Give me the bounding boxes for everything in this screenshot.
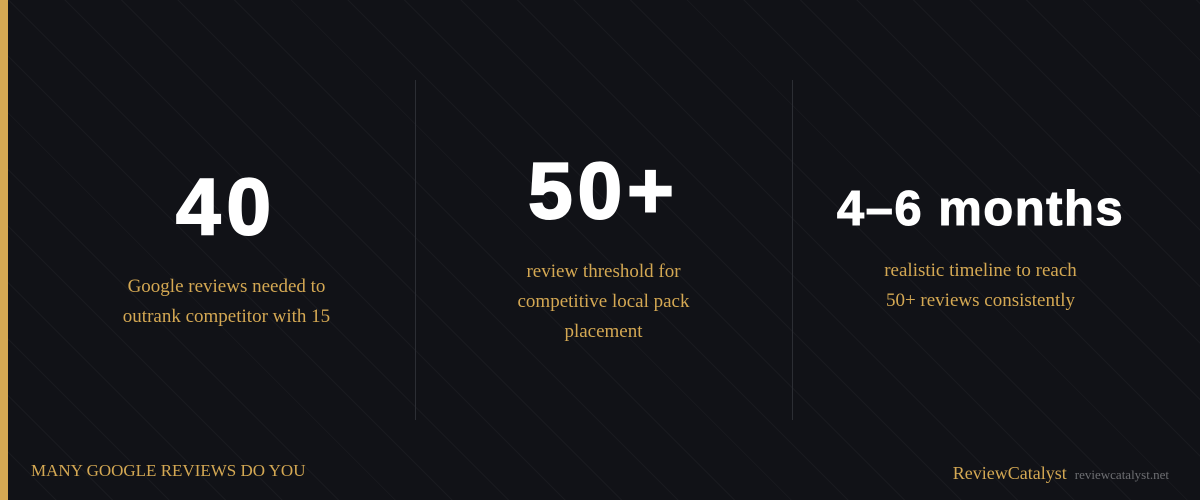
stat: 50+ xyxy=(518,146,690,342)
caption months xyxy=(884,260,1077,311)
stat: 40 xyxy=(123,162,330,327)
number 50+: 50+ xyxy=(528,146,679,235)
stat: 4-6 months xyxy=(837,182,1124,311)
caption months: realistic timeline to reach xyxy=(884,260,1077,281)
number 40: 40 xyxy=(176,162,277,251)
caption 50+: competitive local pack xyxy=(518,291,689,312)
caption months: 50+ reviews consistently xyxy=(886,290,1075,311)
caption 40: Google reviews needed to xyxy=(128,276,325,297)
caption 50+: review threshold for xyxy=(526,261,681,282)
footer brand: ReviewCatalyst reviewcatalyst.net xyxy=(953,463,1169,483)
caption 40: outrank competitor with 15 xyxy=(123,306,330,327)
caption 40 xyxy=(123,276,330,327)
number 4-6 months: 4–6 months xyxy=(837,182,1124,236)
caption 50+ xyxy=(518,261,690,342)
caption 50+: placement xyxy=(564,321,643,342)
footer title: MANY GOOGLE REVIEWS DO YOU xyxy=(31,461,306,480)
